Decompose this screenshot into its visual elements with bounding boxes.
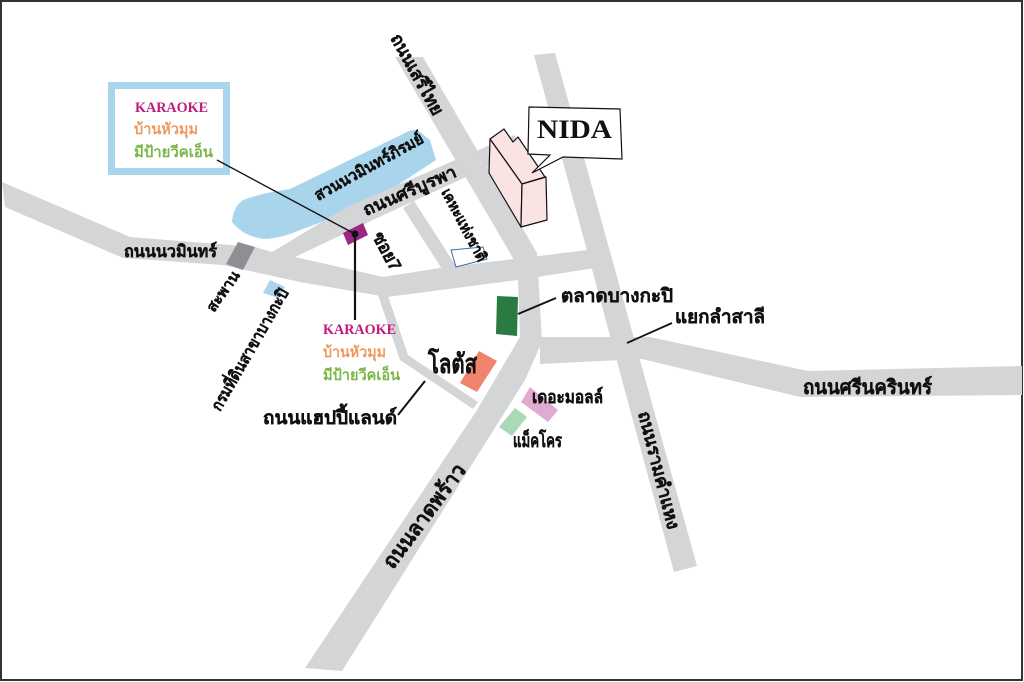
- bridge marker: [226, 242, 255, 270]
- karaoke label: บ้านหัวมุม: [323, 344, 386, 362]
- road and place labels: แม็คโคร: [513, 428, 563, 452]
- Makro building: [499, 408, 527, 436]
- road and place labels: [124, 30, 932, 573]
- road: Soi 7: [403, 201, 456, 269]
- road and place labels: เคหะแห่งชาติ: [437, 185, 491, 265]
- road and place labels: กรมที่ดินสาขาบางกะปิ: [205, 284, 292, 414]
- road and place labels: ถนนลาดพร้าว: [378, 459, 471, 573]
- NIDA callout: NIDA: [537, 115, 612, 144]
- karaoke legend box: บ้านหัวมุม: [134, 121, 198, 139]
- road and place labels: ถนนนวมินทร์: [124, 241, 218, 261]
- road and place labels: ถนนแฮปปี้แลนด์: [263, 403, 397, 429]
- Lotus building: [460, 351, 497, 392]
- road and place labels: เดอะมอลล์: [532, 386, 603, 407]
- karaoke label: มีป้ายวีคเอ็น: [323, 365, 401, 384]
- karaoke legend box: [112, 86, 226, 172]
- karaoke legend box: KARAOKE: [135, 100, 208, 116]
- NIDA callout: [528, 107, 622, 173]
- road and place labels: โลตัส: [427, 347, 477, 379]
- road and place labels: สะพาน: [203, 267, 244, 315]
- marker dot: [352, 230, 358, 238]
- road: Nawamin west: [2, 135, 618, 297]
- road and place labels: ถนนศรีบูรพา: [360, 161, 460, 222]
- land department marker: [263, 280, 285, 298]
- karaoke label: KARAOKE: [323, 322, 396, 338]
- road and place labels: ถนนศรีนครินทร์: [803, 376, 932, 399]
- park lake: [232, 130, 436, 239]
- road: Seri Thai and Lat Phrao: [305, 57, 542, 671]
- road: Srinakarin east: [540, 337, 1022, 397]
- The Mall building: [521, 387, 558, 422]
- road and place labels: แยกลำสาลี: [675, 306, 765, 328]
- road and place labels: สวนนวมินทร์ภิรมย์: [311, 129, 427, 204]
- road: Happy Land: [377, 292, 478, 409]
- karaoke marker: [343, 223, 368, 245]
- road and place labels: ซอย7: [368, 228, 405, 274]
- road: Ramkhamhaeng: [534, 53, 697, 572]
- housing authority outline: [451, 247, 487, 267]
- karaoke legend box: มีป้ายวีคเอ็น: [134, 142, 214, 161]
- road and place labels: ถนนรามคำแหง: [634, 409, 684, 531]
- road and place labels: ตลาดบางกะปิ: [561, 286, 673, 307]
- pointer lines: [217, 160, 672, 415]
- Bang Kapi market: [496, 296, 518, 336]
- karaoke label: [323, 322, 401, 384]
- road and place labels: ถนนเสรีไทย: [387, 30, 449, 119]
- NIDA building: [489, 129, 547, 227]
